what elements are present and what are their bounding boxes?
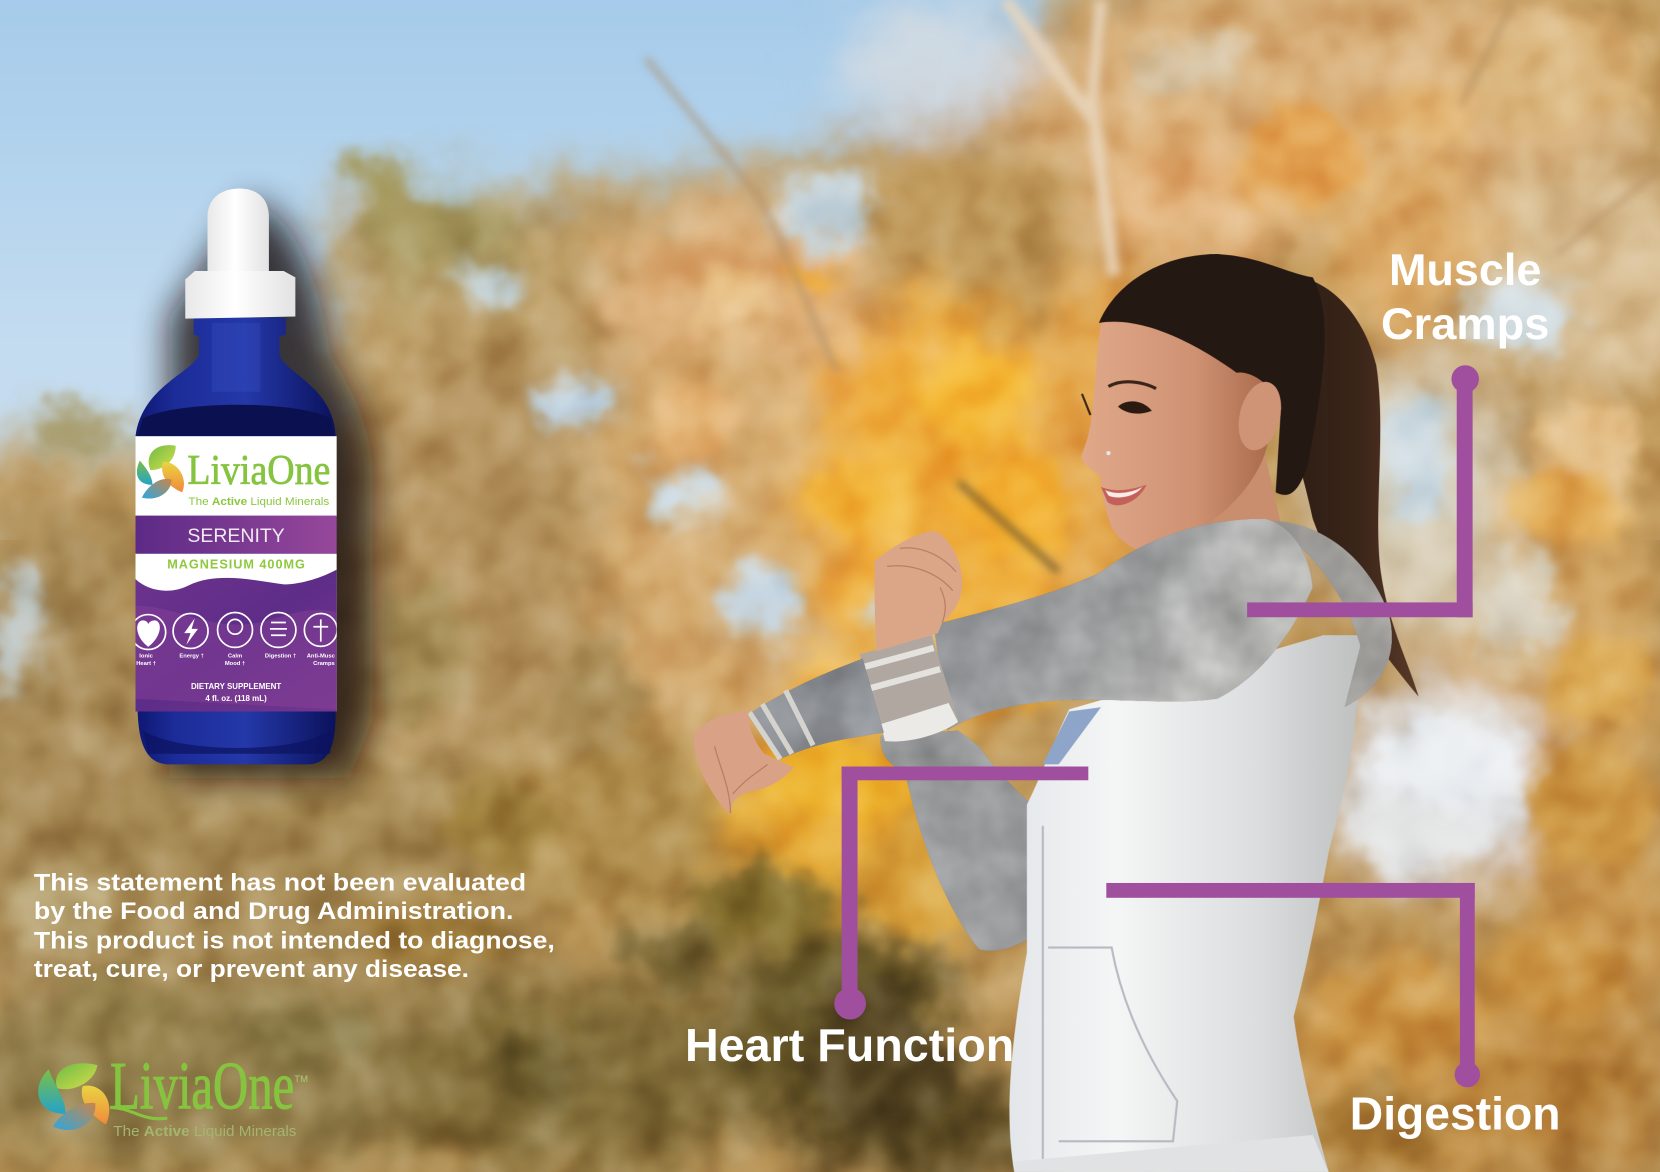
benefit captions: Energy †	[179, 653, 204, 659]
blue shadow at chest	[1043, 707, 1101, 764]
hood	[1265, 521, 1392, 707]
label top white	[136, 436, 337, 517]
label purple band	[136, 516, 337, 554]
hoodie body	[1009, 635, 1360, 1172]
benefit captions: Ionic	[139, 653, 154, 659]
dropper cap	[185, 271, 295, 319]
benefit icons	[131, 612, 337, 650]
benefit captions	[136, 653, 336, 667]
upper arm sleeve	[934, 519, 1313, 731]
muscle cramps label: Cramps	[1381, 300, 1549, 349]
ponytail	[1265, 275, 1419, 697]
bottle shadow	[169, 201, 373, 778]
muscle cramps label	[1381, 246, 1549, 349]
callout: digestion	[1106, 883, 1560, 1140]
glass reflections	[138, 323, 335, 754]
face details	[1082, 382, 1156, 505]
muscle cramps leader line	[1247, 365, 1479, 617]
raised hand	[874, 531, 962, 651]
logo tagline: The Active Liquid Minerals	[113, 1124, 296, 1140]
digestion label: Digestion	[1350, 1088, 1560, 1140]
muscle cramps label: Muscle	[1389, 246, 1541, 295]
benefit captions: Heart †	[136, 661, 156, 667]
FDA disclaimer: This product is not intended to diagnose,	[34, 928, 555, 955]
neck	[1138, 455, 1281, 536]
LiviaOne logo	[38, 1048, 308, 1140]
logo name: LiviaOne	[110, 1048, 294, 1123]
dietary supplement text: DIETARY SUPPLEMENT	[191, 682, 281, 691]
hoodie zipper and pocket	[1043, 826, 1177, 1172]
benefit captions: Mood †	[225, 661, 245, 667]
logo leaves	[38, 1063, 109, 1130]
logo trademark: TM	[294, 1074, 308, 1085]
dropper bulb	[208, 188, 269, 277]
label variant name: SERENITY	[187, 526, 285, 547]
label logo leaves	[137, 445, 184, 499]
benefit captions: Calm	[228, 653, 242, 659]
lower hand	[693, 711, 794, 815]
head	[1081, 310, 1271, 552]
label brand name: LiviaOne	[187, 447, 330, 494]
label lighter wave	[136, 606, 337, 709]
label wave	[136, 570, 337, 711]
digestion leader line	[1106, 883, 1480, 1087]
logo swash	[110, 1107, 167, 1119]
product bottle	[131, 188, 373, 778]
label tagline: The Active Liquid Minerals	[188, 496, 330, 508]
benefit captions: Digestion †	[265, 653, 296, 659]
far arm	[880, 731, 1032, 951]
hoodie hem	[1014, 1135, 1329, 1172]
FDA disclaimer: by the Food and Drug Administration.	[34, 898, 513, 925]
heart function label: Heart Function	[685, 1019, 1014, 1071]
label magnesium dose: MAGNESIUM 400MG	[167, 558, 305, 572]
glass bottle	[136, 318, 336, 764]
forearm sleeve	[747, 659, 884, 760]
FDA disclaimer: This statement has not been evaluated	[34, 869, 526, 896]
FDA disclaimer	[34, 869, 555, 983]
heart function leader line	[834, 767, 1088, 1020]
FDA disclaimer: treat, cure, or prevent any disease.	[34, 956, 469, 983]
label lower panel	[136, 554, 337, 711]
volume text: 4 fl. oz. (118 mL)	[205, 694, 267, 703]
ear	[1232, 377, 1288, 455]
callout: muscle cramps	[1247, 246, 1549, 617]
hair top	[1099, 254, 1325, 495]
forearm stripes	[750, 690, 813, 759]
woman stretching	[693, 254, 1419, 1172]
benefit captions: Anti-Musc	[307, 653, 336, 659]
benefit captions: Cramps	[313, 661, 335, 667]
callout: heart function	[685, 767, 1088, 1071]
cuff	[860, 635, 958, 741]
